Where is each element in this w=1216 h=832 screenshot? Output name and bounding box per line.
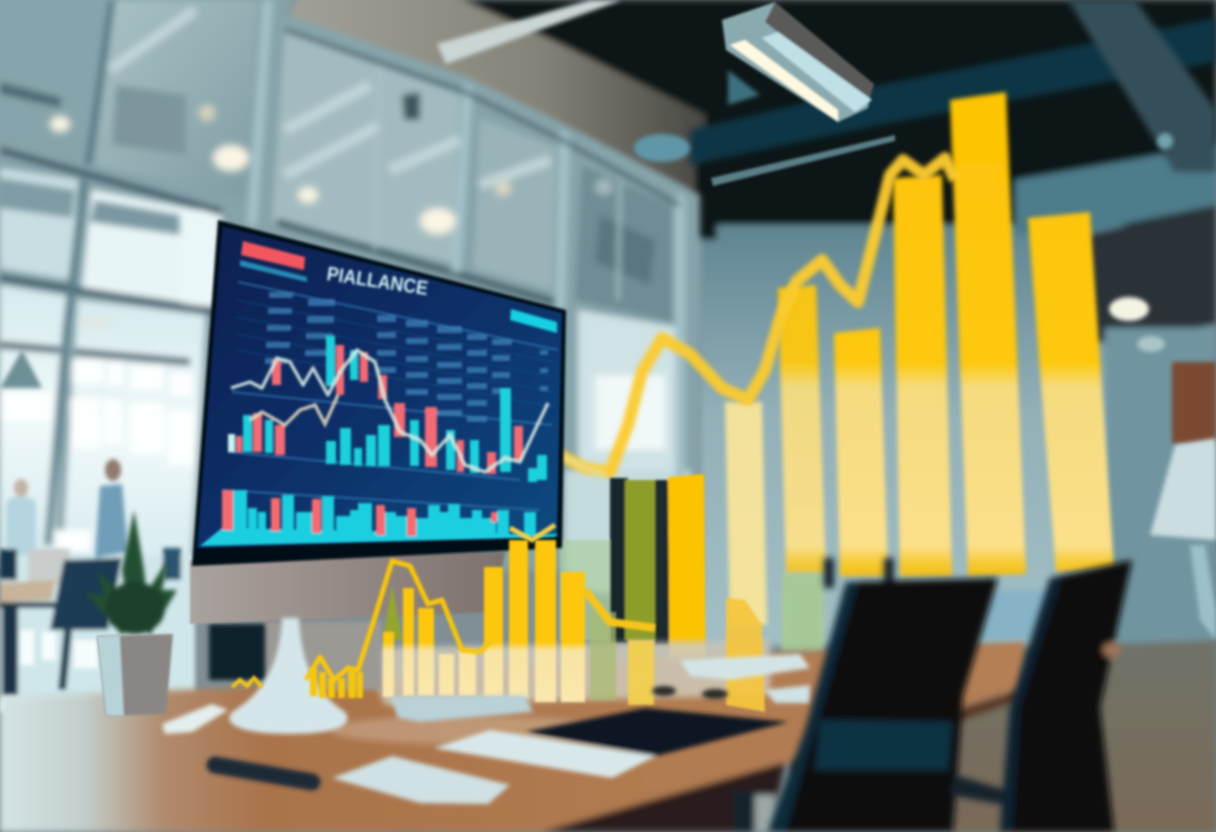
air duct xyxy=(690,18,1216,165)
glass frames xyxy=(0,150,565,362)
lower panes xyxy=(0,285,68,555)
screen title: PIALLANCE xyxy=(325,263,429,300)
bright background grid xyxy=(0,360,194,552)
bar xyxy=(834,328,888,576)
pendant lamp xyxy=(0,350,42,388)
middle panes xyxy=(0,168,78,280)
lower pipe xyxy=(711,135,895,186)
yellow bar xyxy=(668,474,706,710)
wood panel xyxy=(1172,362,1216,444)
bar xyxy=(950,92,1026,576)
dark bar xyxy=(655,480,669,645)
large yellow trend line xyxy=(515,158,955,496)
red badge xyxy=(241,241,305,270)
armrest knob xyxy=(1103,643,1121,657)
small yellow bar chart xyxy=(310,540,765,712)
upper panes xyxy=(0,0,105,150)
screen contents xyxy=(200,241,558,546)
dark desk pad xyxy=(525,708,788,756)
grey wall behind stand xyxy=(262,622,382,690)
wall panel right xyxy=(1105,328,1216,650)
office chairs xyxy=(768,558,1132,832)
pale-green bar xyxy=(590,612,616,700)
lower strip bars xyxy=(200,490,558,546)
plant xyxy=(85,510,177,716)
lamp bracket xyxy=(728,70,760,105)
upper wall above windows xyxy=(285,0,705,205)
wall behind desk xyxy=(960,590,1050,640)
desk edge xyxy=(790,690,1020,778)
dark interior shadows xyxy=(0,82,62,108)
bar xyxy=(725,402,767,625)
notebook behind xyxy=(390,695,533,722)
bright floor xyxy=(0,555,195,705)
wall strip upper right xyxy=(1015,145,1216,235)
bright blobs on floor xyxy=(0,630,100,712)
small yellow trend line xyxy=(232,525,655,687)
small bars xyxy=(383,540,585,702)
translucent haze behind small bars xyxy=(360,640,770,705)
sub-heading bar xyxy=(240,260,307,282)
dark column xyxy=(695,155,717,240)
windows xyxy=(0,0,700,600)
notepad xyxy=(332,756,510,804)
whiteboard xyxy=(1150,438,1216,640)
red candles xyxy=(236,345,523,474)
ceiling fixtures xyxy=(437,0,1216,444)
duct end xyxy=(634,134,690,162)
pot xyxy=(97,634,173,716)
screen line chart xyxy=(231,350,548,472)
green wash xyxy=(782,572,824,652)
table grid lines xyxy=(222,282,558,510)
ceiling lights xyxy=(50,105,613,329)
papers on far desk xyxy=(680,654,810,680)
dark bar xyxy=(610,478,628,643)
dark knobs xyxy=(652,686,676,696)
floor xyxy=(950,640,1216,832)
bar xyxy=(778,285,826,572)
person far xyxy=(6,479,36,555)
monitor stand xyxy=(229,618,348,734)
wall spot lights xyxy=(1109,297,1149,321)
table values xyxy=(265,292,548,422)
cyan badge xyxy=(510,309,557,333)
small rear bars xyxy=(628,640,654,705)
olive bar xyxy=(625,480,656,640)
ceiling lamp xyxy=(722,2,874,122)
chair connector xyxy=(950,775,1005,805)
desk xyxy=(0,642,1025,832)
far chairs and table xyxy=(0,549,17,580)
under desk xyxy=(540,762,785,832)
dark block behind stand xyxy=(209,624,265,680)
leaves xyxy=(85,510,177,635)
bar xyxy=(1028,212,1114,572)
desk reflection xyxy=(330,716,610,744)
bezel xyxy=(192,220,566,566)
olive wedge xyxy=(383,585,402,640)
tablet near stand xyxy=(162,704,228,734)
trusses xyxy=(110,10,550,185)
beam xyxy=(1068,0,1216,172)
tiny bars near base xyxy=(310,668,363,698)
screen xyxy=(197,226,562,548)
monitor xyxy=(190,220,566,734)
monitor chin xyxy=(190,552,505,624)
bar xyxy=(893,175,952,576)
person standing xyxy=(95,459,128,558)
large yellow bar chart xyxy=(725,92,1114,652)
dark recess right xyxy=(1085,205,1216,345)
mid bars behind monitor xyxy=(560,474,706,710)
green wash xyxy=(560,540,610,640)
desk items xyxy=(162,654,810,804)
ceiling xyxy=(440,0,1216,240)
people and furniture behind the window xyxy=(0,350,195,712)
chair left xyxy=(768,558,998,832)
tube light xyxy=(437,0,622,64)
cyan candles xyxy=(228,336,547,482)
white paper xyxy=(434,730,656,778)
right wall xyxy=(700,225,1216,645)
chair right xyxy=(1000,560,1132,832)
pen or marker xyxy=(215,765,312,782)
